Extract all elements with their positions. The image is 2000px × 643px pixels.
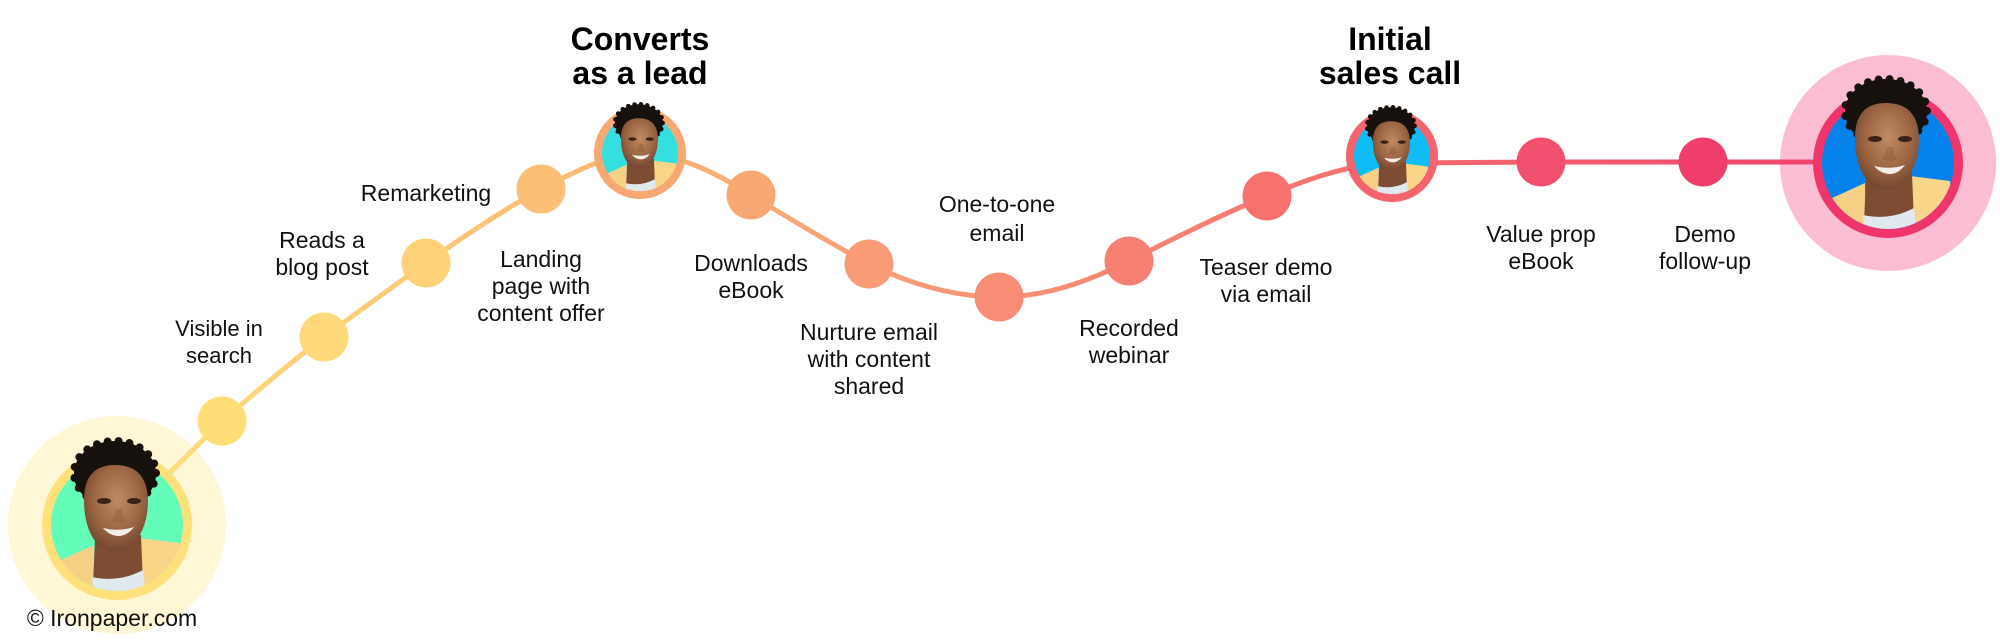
step labels: Recorded	[1079, 315, 1179, 341]
start portrait halo	[8, 416, 226, 634]
step labels: Landing	[500, 246, 582, 272]
step labels: Nurture email	[800, 319, 938, 345]
end portrait	[1813, 79, 1963, 238]
step labels: blog post	[275, 254, 369, 280]
step labels: via email	[1221, 281, 1311, 307]
step labels: Reads a	[279, 227, 365, 253]
step labels: webinar	[1088, 342, 1170, 368]
heading: initial sales call: Initial	[1348, 21, 1432, 57]
start portrait	[42, 441, 192, 600]
step labels	[175, 180, 1751, 399]
step labels: eBook	[1508, 248, 1574, 274]
step labels: eBook	[718, 277, 784, 303]
sales call portrait	[1346, 107, 1438, 202]
heading: initial sales call: sales call	[1319, 55, 1461, 91]
step labels: shared	[834, 373, 904, 399]
journey path line	[117, 153, 1888, 525]
step labels: content offer	[477, 300, 605, 326]
heading: converts as a lead: as a lead	[572, 55, 708, 91]
step labels: Downloads	[694, 250, 808, 276]
step labels: search	[186, 343, 252, 368]
heading: converts as a lead: Converts	[571, 21, 709, 57]
step labels: One-to-one	[939, 191, 1055, 217]
step labels: Teaser demo	[1200, 254, 1332, 280]
step labels: email	[970, 220, 1024, 246]
step labels: Value prop	[1486, 221, 1596, 247]
step labels: page with	[492, 273, 590, 299]
step labels: Visible in	[175, 316, 263, 341]
step labels: with content	[807, 346, 931, 372]
end portrait halo	[1780, 55, 1996, 271]
step labels: follow-up	[1659, 248, 1751, 274]
journey nodes	[198, 138, 1728, 446]
step labels: Demo	[1674, 221, 1736, 247]
copyright: © Ironpaper.com	[27, 605, 197, 631]
lead portrait	[594, 104, 686, 199]
step labels: Remarketing	[361, 180, 491, 206]
